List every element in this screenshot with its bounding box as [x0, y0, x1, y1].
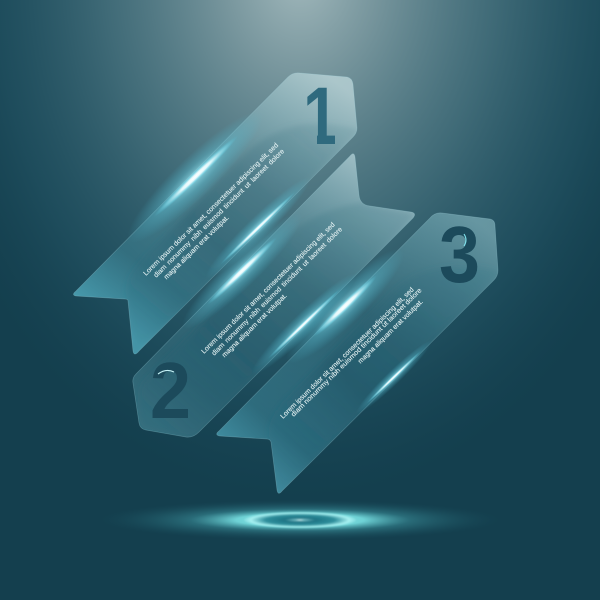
panel 3 glass body: [217, 213, 498, 493]
panel 2 inner shade: [200, 204, 414, 375]
panel 2 text: diam nonummy nibh euismod tincidunt ut laoreet dolore: [211, 226, 344, 357]
number 1: 1: [303, 71, 339, 162]
number 3: 3: [439, 210, 480, 300]
panel 1 text: Lorem ipsum dolor sit amet, consectetuer adipiscing elit, sed: [142, 142, 280, 277]
panel 2 text: magna aliquam erat volutpat.: [221, 292, 289, 359]
number 2: 2: [150, 346, 191, 436]
panel 1 text: diam nonummy nibh euismod tincidunt ut laoreet dolore: [153, 148, 286, 279]
panel 1: [74, 71, 360, 354]
light flares: [115, 99, 436, 418]
panel 2: [133, 154, 415, 437]
panel 2 text: Lorem ipsum dolor sit amet, consectetuer adipiscing elit, sed: [200, 221, 337, 355]
panel 1 glass body: [74, 73, 357, 354]
panel 2 glass body: [133, 154, 415, 437]
panel 1 text: magna aliquam erat volutpat.: [163, 214, 231, 281]
panel 3 inner shade: [324, 361, 336, 448]
panel 1 inner shade: [170, 125, 356, 270]
panel 3 text: Lorem ipsum dolor sit amet, consectetuer adipiscing elit, sed: [279, 286, 416, 420]
panel 3: [217, 210, 500, 493]
panel 3 text: magna aliquam erat volutpat.: [357, 299, 425, 365]
panel 3 text: diam nonummy nibh euismod tincidunt ut laoreet dolore: [290, 287, 424, 418]
floor glow: [100, 500, 500, 540]
